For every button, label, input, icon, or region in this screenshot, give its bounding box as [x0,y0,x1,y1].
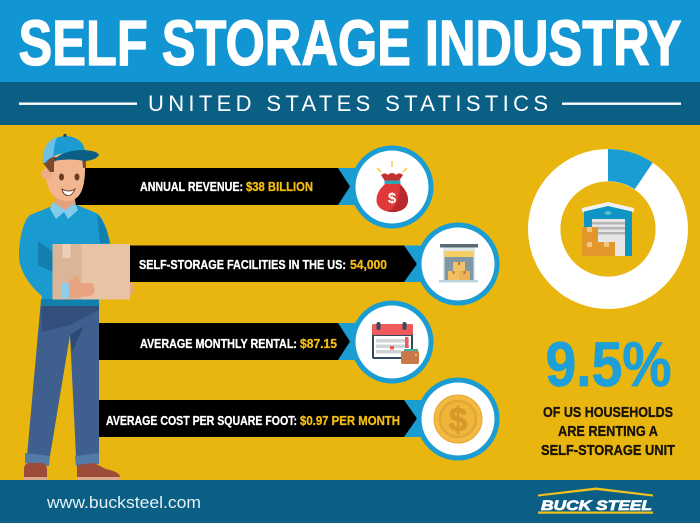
stat row: annual revenue: ANNUAL REVENUE: [140,179,243,194]
header band: blue [0,0,700,82]
logo: Buck Steel [538,488,653,514]
trousers [25,298,99,466]
sweater [19,205,110,306]
stat row: average cost per square foot: AVERAGE COST PER SQUARE FOOT: [106,413,297,428]
icon: money bag [376,161,408,212]
icon: money bag: $ [388,190,397,207]
stat row: average monthly rental [90,300,434,384]
background panel: yellow [0,125,700,480]
stat row: average monthly rental: $87.15 [300,336,337,351]
statistic caption: OF US HOUSEHOLDS [543,404,673,421]
stat row: self-storage facilities: 54,000 [350,257,387,272]
website: www.bucksteel.com [46,493,201,512]
icon: gold coin: $ [449,401,467,438]
sweater shading [38,214,110,306]
donut slice: 9.5% [608,149,653,189]
subtitle: UNITED STATES STATISTICS [148,91,548,116]
icon: storage unit [439,244,478,282]
icon: gold coin [434,395,482,443]
stat row: average cost per square foot [90,378,500,460]
stat row: annual revenue: $38 BILLION [246,179,313,194]
stat row: average cost per square foot: $0.97 PER MONTH [300,413,400,428]
cap [43,134,99,163]
hands [62,275,134,298]
icon: calendar and wallet [372,322,419,364]
head [42,150,86,201]
collar [50,202,78,219]
footer band [0,480,700,523]
statistic caption: ARE RENTING A [558,423,658,440]
delivery man illustration [19,134,134,480]
logo: Buck Steel: BUCK STEEL [541,497,652,513]
neck [54,190,76,212]
big statistic: 9.5% [546,330,672,400]
statistic caption: SELF-STORAGE UNIT [541,442,675,459]
donut chart [544,149,672,293]
stat row: self-storage facilities: SELF-STORAGE FACILITIES IN THE US: [139,257,346,272]
subtitle band [0,82,700,125]
stat row: self-storage facilities [125,222,500,306]
icon: warehouse [582,202,634,256]
shoes [24,463,120,480]
stat row: average monthly rental: AVERAGE MONTHLY RENTAL: [140,336,297,351]
statistic caption [541,404,675,459]
cardboard box [52,244,130,300]
stat row: annual revenue [70,146,434,228]
